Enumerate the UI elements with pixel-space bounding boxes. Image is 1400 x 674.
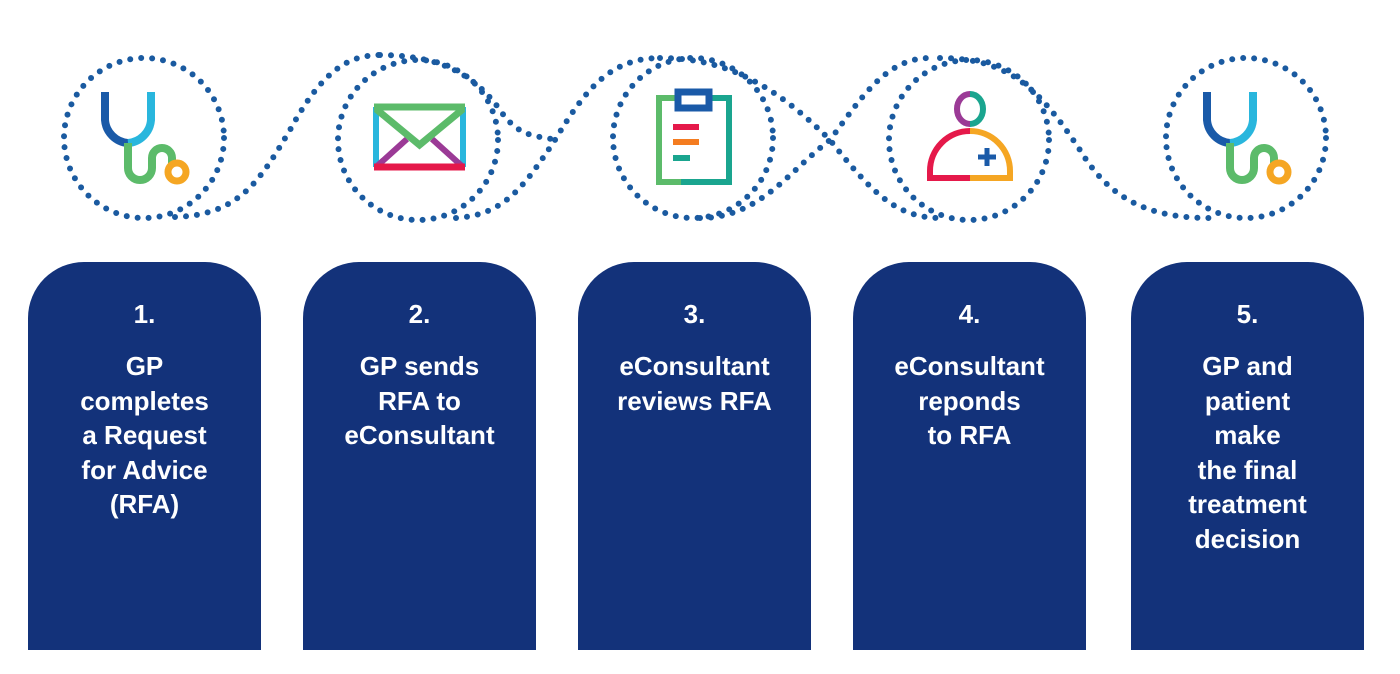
panel: step 1: GP (126, 351, 163, 381)
panel: step 2 (303, 262, 536, 650)
panel: step 3: reviews RFA (617, 386, 772, 416)
panel: step 5: decision (1195, 524, 1300, 554)
panel: step 2: 2. (409, 299, 430, 329)
panel: step 4: to RFA (928, 420, 1011, 450)
icon: stethoscope 1 (101, 92, 190, 184)
panel: step 2: GP sends (360, 351, 479, 381)
panel: step 1: a Request (82, 420, 207, 450)
panel: step 5: treatment (1188, 489, 1307, 519)
panel: step 1: (RFA) (110, 489, 179, 519)
panel: step 4: reponds (918, 386, 1021, 416)
panel: step 5: GP and (1202, 351, 1293, 381)
panel: step 3: eConsultant (619, 351, 770, 381)
panel: step 1: completes (80, 386, 209, 416)
panel: step 3: 3. (684, 299, 705, 329)
panel: step 5: 5. (1237, 299, 1258, 329)
panel: step 5: patient (1205, 386, 1290, 416)
icon: consultant (927, 91, 1013, 181)
panel: step 2: RFA to (378, 386, 461, 416)
icon: stethoscope 5 (1203, 92, 1292, 184)
panel: step 1: 1. (134, 299, 155, 329)
panel: step 3 (578, 262, 811, 650)
icon: envelope (373, 104, 466, 170)
panel: step 2: eConsultant (344, 420, 495, 450)
panel: step 1 (28, 262, 261, 650)
panel: step 4 (853, 262, 1086, 650)
panel: step 4: eConsultant (894, 351, 1045, 381)
icon: clipboard (656, 88, 732, 185)
panel: step 4: 4. (959, 299, 980, 329)
panel: step 5: make (1214, 420, 1281, 450)
panel: step 1: for Advice (81, 454, 208, 484)
dotted circles and wave connectors (61, 52, 1329, 223)
panel: step 5: the final (1198, 454, 1297, 484)
panel: step 5 (1131, 262, 1364, 650)
